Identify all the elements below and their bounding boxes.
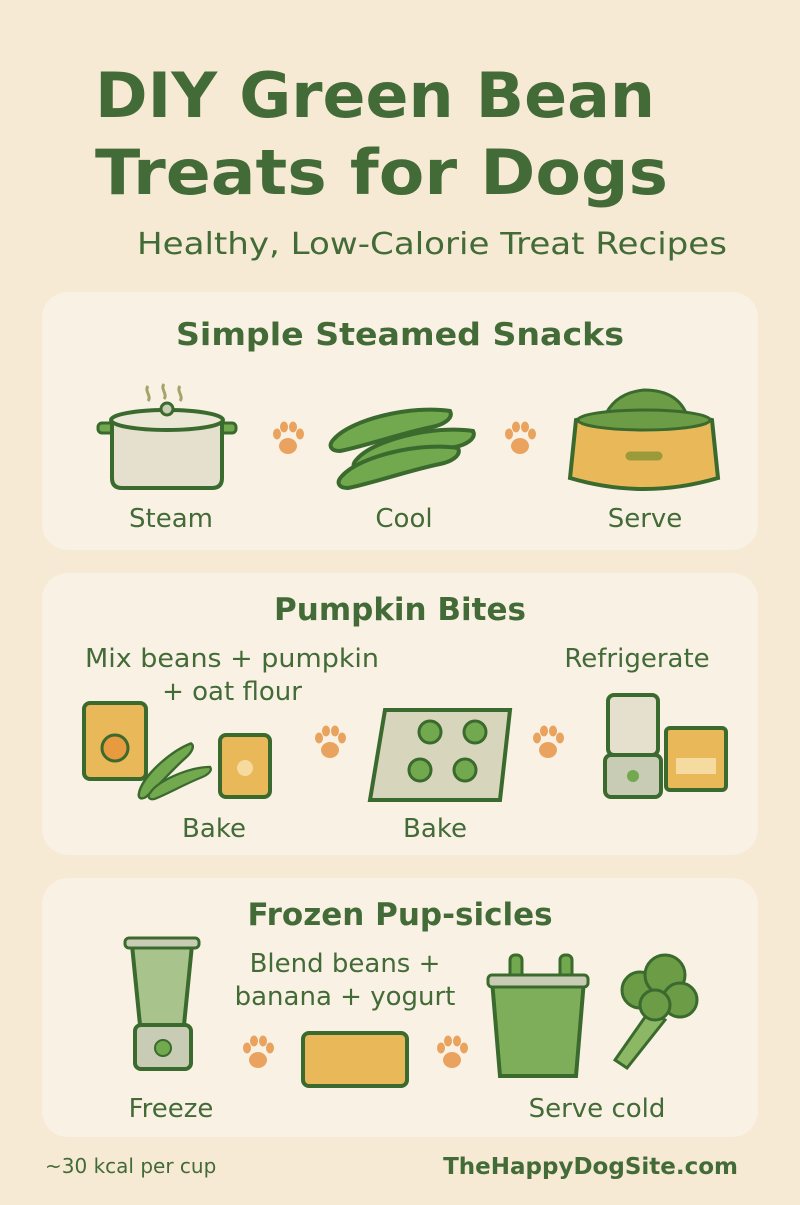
icon: popsicle cup [488,955,588,1076]
labels [129,1094,665,1124]
icon: cheese block [303,1033,407,1086]
labels: Cool [375,504,433,534]
icon: pot [98,384,236,488]
title: Treats for Dogs [95,136,668,209]
heading: simple steamed snacks: Simple Steamed Snacks [176,317,624,353]
title [95,59,668,209]
text: mix: Mix beans + pumpkin [85,644,379,674]
panel: simple steamed snacks [42,292,758,550]
icon: paw [315,726,346,758]
labels: Freeze [129,1094,213,1124]
labels [182,814,467,844]
panel: frozen pup-sicles [42,878,758,1137]
text: blend: banana + yogurt [235,982,455,1012]
heading: pumpkin bites: Pumpkin Bites [274,592,526,628]
labels: Bake [182,814,246,844]
labels: Steam [129,504,213,534]
labels: Serve [608,504,682,534]
icon: pumpkin can with beans [84,703,270,800]
icon: broccoli [615,955,697,1068]
labels: Bake [403,814,467,844]
icon: blender and box [605,695,726,797]
text: mix [85,644,710,707]
icon: paw [505,422,536,454]
text: mix: Refrigerate [564,644,710,674]
labels [129,504,682,534]
text: mix: + oat flour [162,677,302,707]
icon: paw [533,726,564,758]
text: blend: Blend beans + [250,949,440,979]
icon: paw [437,1036,468,1068]
icon: paw [243,1036,274,1068]
subtitle: Healthy, Low-Calorie Treat Recipes [137,227,727,262]
icon: green beans [331,410,474,488]
icon: baking tray [370,710,510,800]
icon: blender [125,938,199,1069]
icon: dog bowl [570,390,718,489]
footer: site: TheHappyDogSite.com [443,1154,738,1180]
icon: paw [273,422,304,454]
labels: Serve cold [529,1094,665,1124]
title: DIY Green Bean [95,59,655,132]
footer: calories: ~30 kcal per cup [45,1154,216,1178]
panel: pumpkin bites [42,573,758,855]
heading: Frozen Pup-sicles [247,897,553,933]
text: blend [235,949,455,1012]
